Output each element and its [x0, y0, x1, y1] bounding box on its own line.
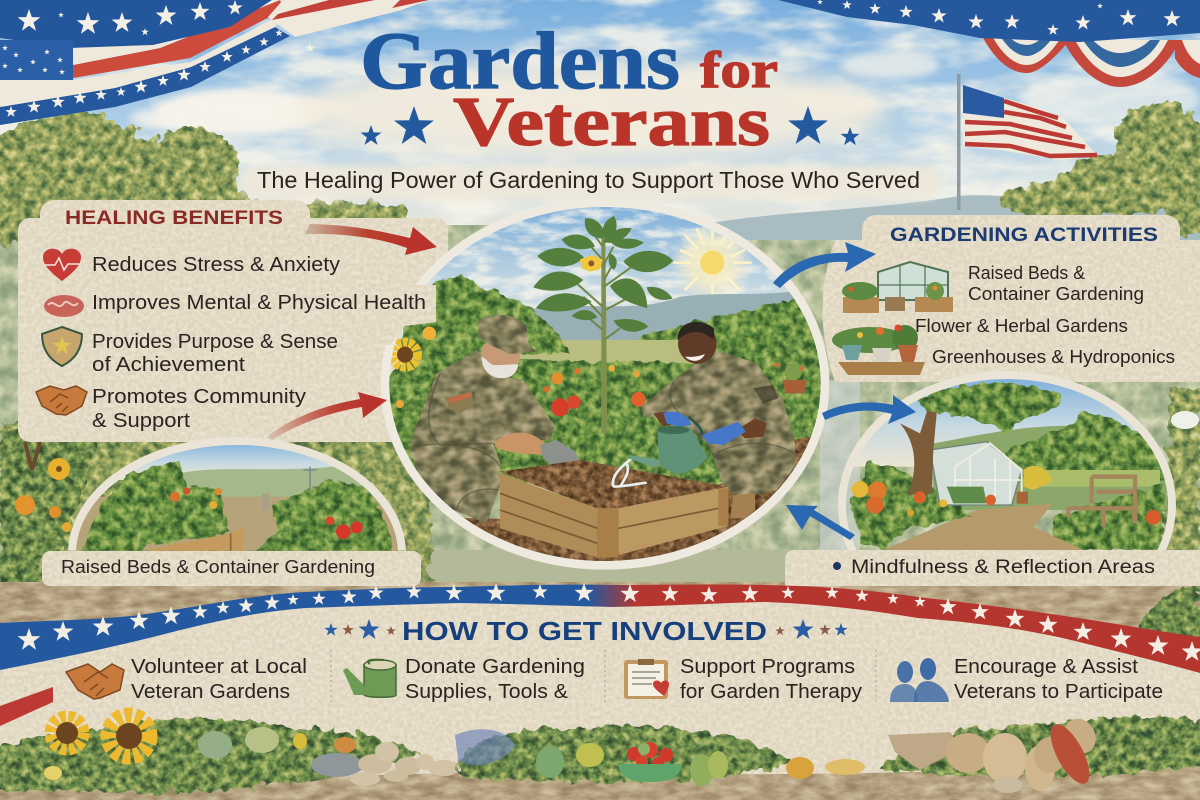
scene: left soldier — [410, 315, 580, 524]
panel: gardening activities background — [822, 240, 1200, 382]
heading: healing benefits — [40, 200, 310, 235]
item: volunteer: Volunteer at Local — [131, 656, 307, 678]
background: right edge garden — [1135, 388, 1200, 640]
title: Gardens — [360, 15, 680, 106]
arrow: blue to mindfulness circle — [822, 395, 916, 424]
item: donate — [343, 656, 585, 703]
caption: raised beds — [42, 551, 421, 586]
garden border: center plants and bowl — [455, 727, 865, 786]
list: gardening activities — [832, 262, 1175, 375]
icon: shield — [42, 327, 82, 366]
arrow: blue from mindfulness to center — [786, 505, 855, 540]
scene: right soldier — [642, 322, 795, 518]
text: greenhouses: Greenhouses & Hydroponics — [932, 347, 1175, 367]
icon: brain — [44, 295, 84, 317]
background: trees right — [1000, 100, 1200, 235]
icon: two people — [890, 658, 949, 702]
scene: sky — [392, 207, 789, 360]
caption: mindfulness: Mindfulness & Reflection Areas — [851, 557, 1155, 578]
sunflower left — [51, 717, 83, 749]
top left flag banner — [0, 0, 429, 125]
panel: healing benefits overlap onto circle — [380, 255, 436, 345]
text: raised beds: Raised Beds & — [968, 263, 1085, 283]
scene: watering can — [628, 417, 707, 474]
icon: handshake — [66, 664, 124, 699]
background: trees left — [0, 113, 410, 245]
ground: bottom soil — [0, 762, 1200, 800]
icon: watering can — [343, 660, 396, 697]
icon: greenhouse with planters — [842, 262, 953, 313]
arrow: red to center lower — [267, 392, 387, 440]
red stripe left — [0, 687, 53, 726]
background: title glow — [240, 60, 940, 200]
scene: water stream — [613, 457, 647, 487]
top right banner with bunting — [778, 0, 1200, 87]
title — [360, 15, 778, 161]
icon: handshake — [36, 386, 87, 415]
item: donate: Donate Gardening — [405, 656, 585, 678]
text: promotes community: Promotes Community — [92, 386, 306, 408]
scene: sapling — [533, 216, 674, 434]
item: encourage — [890, 656, 1163, 703]
background: sky with clouds — [0, 0, 1200, 250]
title: for — [700, 42, 778, 99]
dividers — [331, 650, 876, 705]
text: of achievement: of Achievement — [92, 354, 245, 376]
background: dirt path band — [0, 582, 1200, 632]
subtitle: The Healing Power of Gardening to Support Those Who Served — [257, 167, 920, 193]
heading: how to get involved: HOW TO GET INVOLVED — [402, 616, 767, 646]
heading: gardening activities: GARDENING ACTIVITIES — [890, 225, 1158, 246]
text: container gardening: Container Gardening — [968, 284, 1144, 304]
scene: sun — [673, 225, 752, 295]
background: lower left garden — [0, 425, 430, 590]
illustration: veterans gardening at raised bed — [380, 200, 830, 573]
arrow: blue to gardening activities — [773, 242, 876, 288]
item: encourage: Encourage & Assist — [954, 656, 1138, 678]
illustration: mindfulness garden circle — [840, 373, 1173, 635]
item: support — [624, 656, 862, 703]
panel: how to get involved background — [0, 593, 1200, 800]
text: flower gardens: Flower & Herbal Gardens — [915, 316, 1128, 336]
panel: healing benefits background — [18, 218, 448, 442]
arrow: red to center top — [305, 224, 437, 255]
heading: healing benefits: HEALING BENEFITS — [65, 208, 283, 229]
scene: hills and meadow — [400, 274, 818, 364]
caption: mindfulness — [785, 550, 1200, 586]
text: and support: & Support — [92, 410, 190, 432]
sunflower right — [109, 716, 149, 756]
list: healing benefits — [36, 249, 426, 432]
background: meadow behind panels — [0, 195, 1200, 600]
heading: how to get involved — [324, 616, 848, 646]
icon: flower pots tray — [832, 324, 925, 375]
garden border: right plants and stones — [880, 713, 1200, 793]
blue star ribbon — [0, 27, 290, 125]
ribbon: patriotic band — [0, 583, 1200, 673]
title stars — [361, 106, 860, 145]
american flag on pole — [957, 74, 1097, 210]
item: donate: Supplies, Tools & — [405, 681, 569, 703]
item: support: for Garden Therapy — [680, 681, 862, 703]
scene: raised bed — [500, 460, 728, 557]
icon: clipboard — [624, 659, 669, 699]
text: reduces stress: Reduces Stress & Anxiety — [92, 254, 340, 276]
title: Veterans — [453, 84, 770, 161]
caption: raised beds: Raised Beds & Container Gardening — [61, 557, 375, 577]
scene: plants — [383, 351, 830, 483]
item: encourage: Veterans to Participate — [954, 681, 1163, 703]
text: provides purpose: Provides Purpose & Sense — [92, 331, 338, 353]
item: support: Support Programs — [680, 656, 855, 678]
bunting swags — [982, 36, 1200, 87]
illustration: raised beds circle — [68, 437, 406, 551]
text: improves health: Improves Mental & Physical Health — [92, 292, 426, 314]
heading: gardening activities — [862, 215, 1180, 251]
item: volunteer: Veteran Gardens — [131, 681, 290, 703]
garden border: left plants — [0, 716, 460, 792]
item: volunteer — [66, 656, 307, 703]
scene: ground — [464, 436, 811, 561]
ring: center circle border — [385, 203, 825, 565]
scene: flowers and tomatoes — [393, 327, 807, 416]
icon: heart — [43, 249, 81, 281]
bowl of tomatoes — [618, 742, 682, 782]
